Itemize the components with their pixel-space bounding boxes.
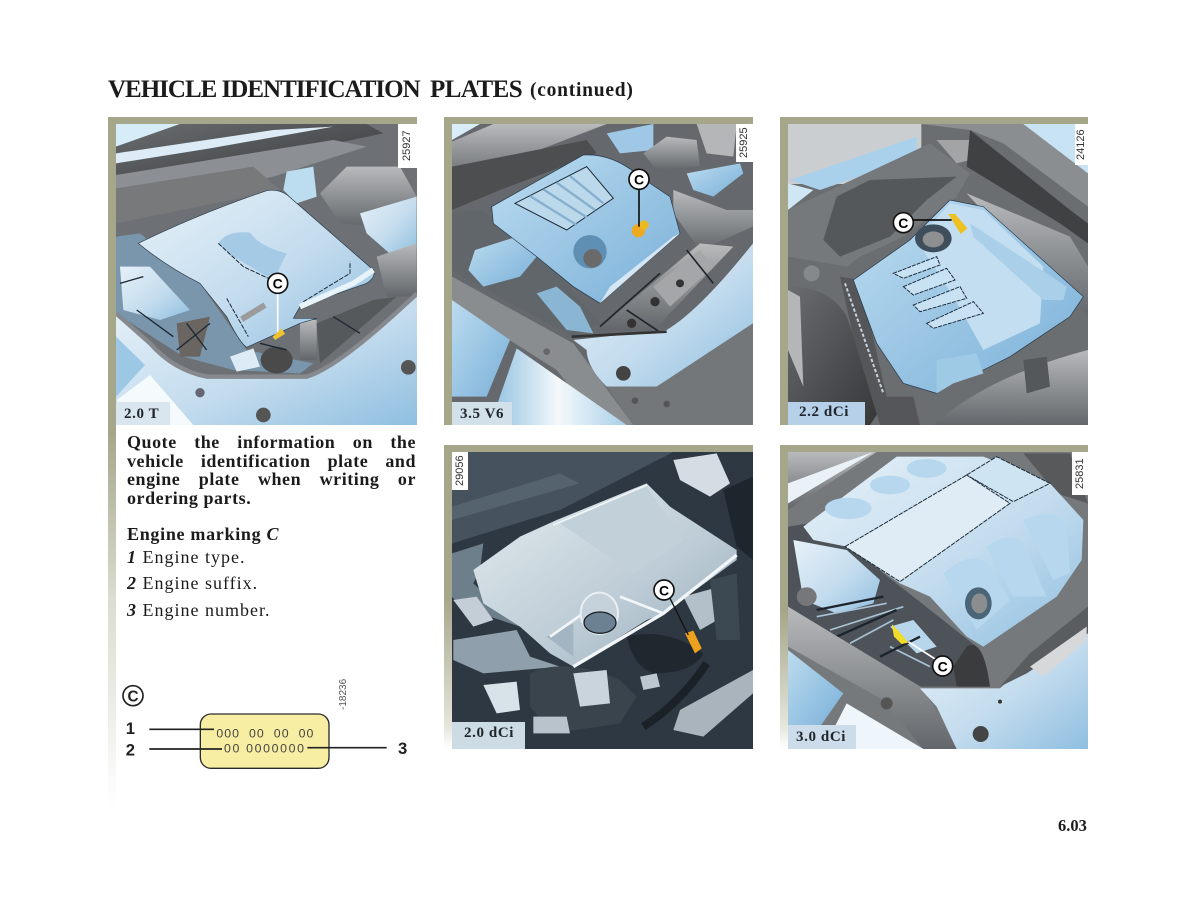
- panel: 3.0 dCi engine illustration: [788, 452, 1088, 749]
- heading: engine marking: Engine marking C: [127, 524, 279, 544]
- image number 18236: -18236: [338, 678, 349, 710]
- title: VEHICLE IDENTIFICATION: [108, 76, 420, 103]
- label: 3.0 dCi: 3.0 dCi: [796, 729, 846, 745]
- image number 29056: [452, 452, 468, 490]
- image number 25927: 25927: [401, 131, 413, 161]
- numbers 1 2 3: 2: [126, 740, 135, 759]
- label: 2.0 dCi: [452, 722, 525, 749]
- numbers 1 2 3: 3: [398, 739, 407, 758]
- image number 24126: [1075, 124, 1088, 165]
- leader lines: [149, 729, 387, 749]
- image number 25925: 25925: [738, 128, 750, 158]
- panel: frame for 2.0 T and text column: [108, 117, 417, 774]
- title: [108, 76, 634, 103]
- legend item 2: 2 Engine suffix.: [127, 573, 258, 593]
- panel: frame for 3.5 V6: [444, 117, 753, 425]
- image number 24126: 24126: [1075, 129, 1087, 160]
- text block: quote information: Quote the information on the: [127, 432, 416, 452]
- callout C: [629, 169, 649, 227]
- callout C: C: [634, 172, 644, 188]
- panel: frame for 2.2 dCi: [780, 117, 1088, 425]
- title: PLATES: [430, 76, 522, 103]
- panel: 2.0 T engine illustration: [116, 124, 417, 425]
- yellow plate: [200, 714, 329, 768]
- callout C: [268, 273, 288, 332]
- numbers 1 2 3: [126, 719, 407, 759]
- image number 25927: [398, 124, 417, 168]
- callout C: C: [898, 215, 908, 231]
- label: 3.5 V6: 3.5 V6: [460, 406, 504, 422]
- label: 2.0 T: 2.0 T: [124, 406, 159, 422]
- marker C: C: [127, 688, 139, 705]
- panel: frame for 2.0 dCi: [444, 445, 753, 749]
- marker C: [123, 686, 143, 706]
- diagram: engine plate C: [122, 678, 407, 769]
- callout C: C: [273, 276, 283, 292]
- text block: quote information: vehicle identification plate and: [127, 451, 416, 471]
- image number 25831: [1072, 452, 1088, 495]
- label: 3.5 V6: [452, 402, 512, 425]
- callout C: [893, 213, 952, 233]
- legend item 1: 1 Engine type.: [127, 547, 245, 567]
- image number 25925: [736, 124, 753, 162]
- title: (continued): [530, 80, 634, 101]
- legend item 3: 3 Engine number.: [127, 600, 270, 620]
- text block: quote information: engine plate when writing or: [127, 469, 416, 489]
- page number: 6.03: [1058, 816, 1087, 835]
- label: 2.2 dCi: [788, 402, 865, 425]
- callout C: [654, 580, 688, 635]
- numbers 1 2 3: 1: [126, 719, 135, 738]
- image number 29056: 29056: [454, 456, 466, 486]
- callout C: C: [938, 658, 948, 674]
- image number 25831: 25831: [1074, 458, 1086, 489]
- label: 2.0 dCi: 2.0 dCi: [464, 725, 514, 741]
- panel: 2.2 dCi engine illustration: [788, 124, 1088, 425]
- panel: 2.0 dCi engine illustration: [452, 452, 753, 749]
- label: 3.0 dCi: [788, 725, 856, 749]
- label: 2.0 T: [116, 402, 170, 425]
- text block: quote information: ordering parts.: [127, 488, 251, 508]
- panel: 3.5 V6 engine illustration: [452, 124, 753, 425]
- text block: quote information: [127, 432, 416, 508]
- callout C: C: [659, 582, 669, 598]
- callout C: [908, 642, 953, 676]
- label: 2.2 dCi: 2.2 dCi: [799, 404, 849, 420]
- panel: frame for 3.0 dCi: [780, 445, 1088, 749]
- plate code line 1: 000 00 00 00: [216, 727, 313, 741]
- plate code line 2: 00 0000000: [224, 741, 304, 755]
